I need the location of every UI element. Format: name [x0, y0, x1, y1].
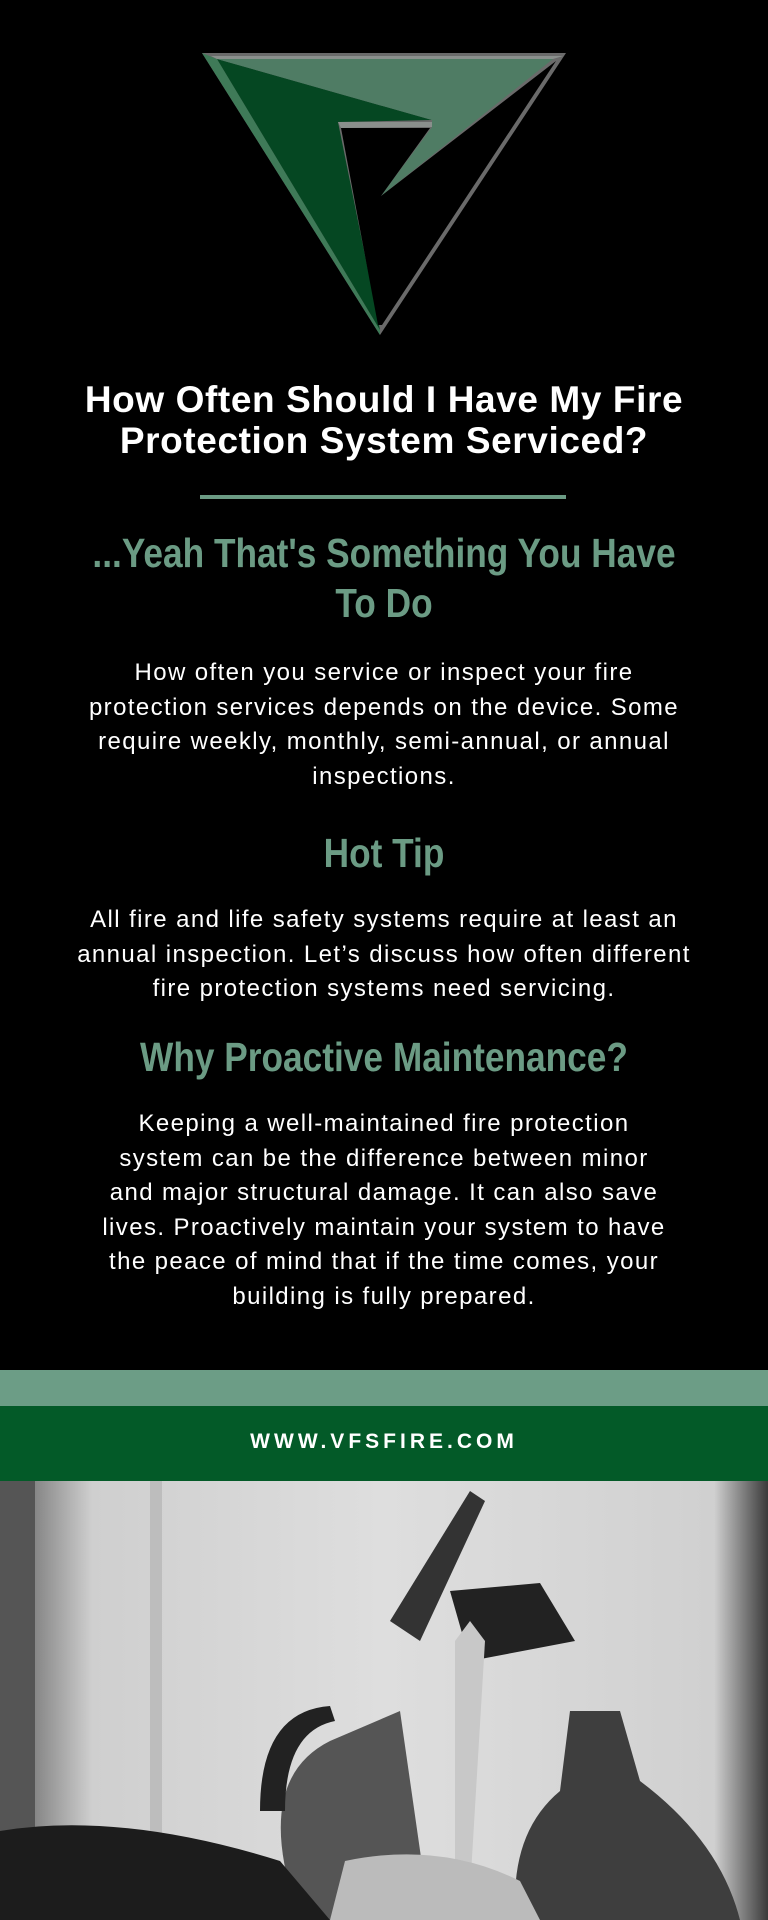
paragraph 3: Keeping a well-maintained fire protection	[138, 1110, 629, 1137]
divider	[200, 495, 566, 499]
paragraph 3: building is fully prepared.	[232, 1282, 536, 1310]
paragraph 2: All fire and life safety systems require at least an	[90, 906, 678, 933]
title	[85, 379, 683, 461]
heading: hot tip: Hot Tip	[324, 830, 444, 876]
paragraph 3: the peace of mind that if the time comes, your	[109, 1248, 659, 1275]
photo: fire extinguisher	[0, 1481, 768, 1920]
heading: yeah	[92, 530, 676, 626]
logo	[202, 53, 566, 335]
paragraph 1	[89, 659, 679, 790]
heading: why proactive: Why Proactive Maintenance?	[140, 1034, 628, 1080]
paragraph 2: fire protection systems need servicing.	[153, 975, 615, 1002]
band: website: WWW.VFSFIRE.COM	[250, 1430, 518, 1453]
paragraph 2	[77, 906, 691, 1002]
heading: yeah: ...Yeah That's Something You Have	[92, 530, 676, 576]
paragraph 2: annual inspection. Let’s discuss how often different	[77, 940, 691, 968]
paragraph 1: protection services depends on the device. Some	[89, 694, 679, 720]
paragraph 3: lives. Proactively maintain your system to have	[102, 1214, 666, 1240]
title: How Often Should I Have My Fire	[85, 379, 683, 420]
paragraph 3	[102, 1110, 666, 1310]
title: Protection System Serviced?	[120, 420, 648, 461]
band: website	[0, 1406, 768, 1481]
paragraph 1: require weekly, monthly, semi-annual, or annual	[98, 728, 670, 755]
paragraph 1: inspections.	[312, 762, 456, 790]
band: light green	[0, 1370, 768, 1406]
heading: yeah: To Do	[335, 580, 433, 626]
paragraph 3: and major structural damage. It can also save	[110, 1179, 658, 1206]
paragraph 1: How often you service or inspect your fire	[134, 659, 634, 686]
paragraph 3: system can be the difference between minor	[119, 1144, 649, 1172]
